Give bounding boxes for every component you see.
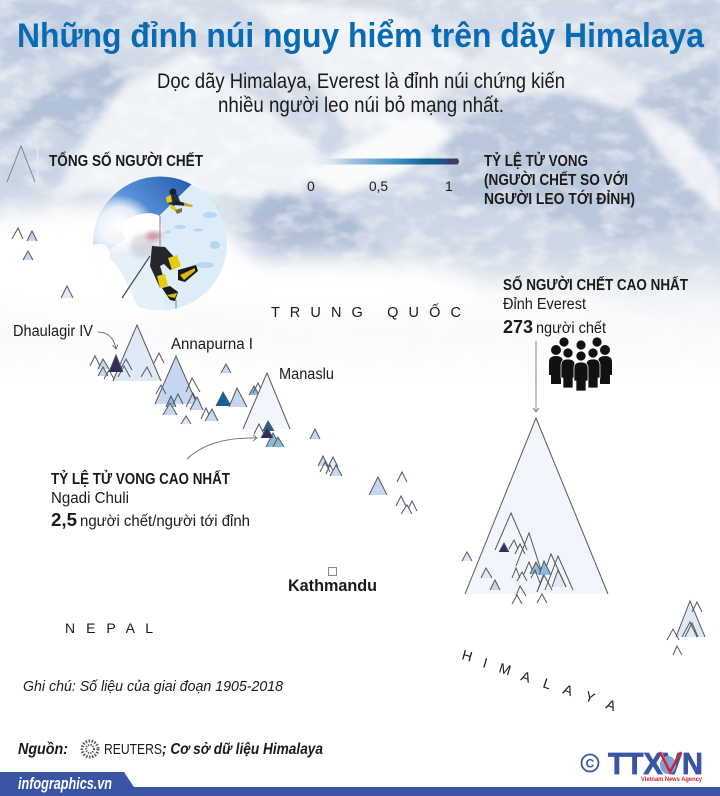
upper climber	[166, 188, 193, 214]
legend label: fatality rate: NGƯỜI LEO TỚI ĐỈNH)	[484, 189, 635, 208]
callout: highest fatality rate: người chết/người tới đỉnh	[80, 513, 250, 530]
icon: mountain size key	[7, 146, 38, 187]
climbers photo circle	[86, 176, 227, 311]
country label: China: T R U N G Q U Ố C	[271, 303, 461, 321]
legend label: fatality rate: (NGƯỜI CHẾT SO VỚI	[484, 170, 628, 189]
legend label: fatality rate: TỶ LỆ TỬ VONG	[484, 151, 588, 170]
footer bar: infographics.vn	[18, 774, 112, 793]
arrow to Ngadi Chuli	[187, 435, 257, 459]
arrow to Everest	[533, 341, 539, 412]
arrow to Dhaulagir IV	[98, 332, 118, 349]
label: Manaslu: Manaslu	[279, 366, 334, 383]
range label: Himalaya: I	[481, 655, 489, 671]
callout: highest fatality rate	[51, 435, 257, 530]
colour bar	[310, 158, 459, 164]
range label: Himalaya: L	[541, 675, 554, 692]
peak cluster: Everest	[462, 418, 608, 604]
icon: group of people	[549, 337, 612, 391]
label: Dhaulagir IV	[13, 323, 118, 349]
callout: highest fatality rate: TỶ LỆ TỬ VONG CAO NHẤT	[51, 469, 230, 488]
range label: Himalaya: M	[497, 660, 513, 678]
label: Dhaulagir IV: Dhaulagir IV	[13, 323, 94, 340]
peak cluster: far west	[12, 228, 73, 298]
subtitle	[157, 70, 565, 117]
callout: highest total deaths: 273	[503, 317, 533, 337]
legend label: total deaths: TỔNG SỐ NGƯỜI CHẾT	[49, 150, 203, 170]
source: REUTERS	[104, 742, 162, 758]
Ngadi Chuli dark peak	[261, 427, 273, 438]
country label: Nepal: N E P A L	[65, 620, 153, 636]
range label: Himalaya: A	[604, 696, 619, 714]
callout: highest fatality rate: Ngadi Chuli	[51, 490, 129, 507]
range label: Himalaya: Y	[583, 688, 598, 706]
map marker: Kathmandu: Kathmandu	[288, 577, 377, 595]
label: Annapurna I: Annapurna I	[171, 336, 253, 353]
note: Ghi chú: Số liệu của giai đoạn 1905-2018	[23, 678, 284, 695]
range label: Himalaya	[460, 647, 619, 714]
subtitle: Dọc dãy Himalaya, Everest là đỉnh núi chứng kiến	[157, 70, 565, 93]
scale labels: 0	[307, 178, 315, 194]
legend label: fatality rate	[484, 151, 635, 208]
callout: highest total deaths: người chết	[536, 320, 607, 337]
source: Nguồn:	[18, 741, 68, 758]
source	[18, 741, 323, 758]
logo: TTXVN: Vietnam News Agency	[641, 777, 703, 783]
callout: highest total deaths	[503, 274, 688, 412]
subtitle: nhiều người leo núi bỏ mạng nhất.	[218, 94, 504, 117]
callout: highest total deaths: SỐ NGƯỜI CHẾT CAO NHẤT	[503, 274, 688, 294]
peak cluster: far east	[667, 601, 705, 655]
range label: Himalaya: A	[561, 681, 576, 699]
lower climber	[122, 216, 198, 311]
map marker: Kathmandu	[288, 568, 377, 595]
scale labels	[307, 178, 453, 194]
callout: highest fatality rate: 2,5	[51, 510, 77, 530]
Dhaulagir IV dark peak	[109, 355, 123, 372]
scale labels: 1	[445, 178, 453, 194]
logo: TTXVN: TTXVN	[608, 746, 703, 781]
scale labels: 0,5	[369, 178, 388, 194]
footer bar	[0, 772, 720, 796]
peak cluster: Manaslu and Ngadi Chuli	[243, 373, 417, 514]
logo: TTXVN: C	[586, 756, 595, 770]
legend: fatality rate colour scale	[307, 151, 635, 208]
callout: highest total deaths: Đỉnh Everest	[503, 296, 587, 313]
icon: Reuters logo	[82, 741, 98, 757]
legend: total deaths	[7, 146, 203, 187]
peak cluster: Dhaulagiri and Annapurna	[90, 325, 263, 424]
range label: Himalaya: H	[460, 647, 474, 665]
source: ; Cơ sở dữ liệu Himalaya	[162, 741, 323, 758]
range label: Himalaya: A	[519, 668, 534, 686]
